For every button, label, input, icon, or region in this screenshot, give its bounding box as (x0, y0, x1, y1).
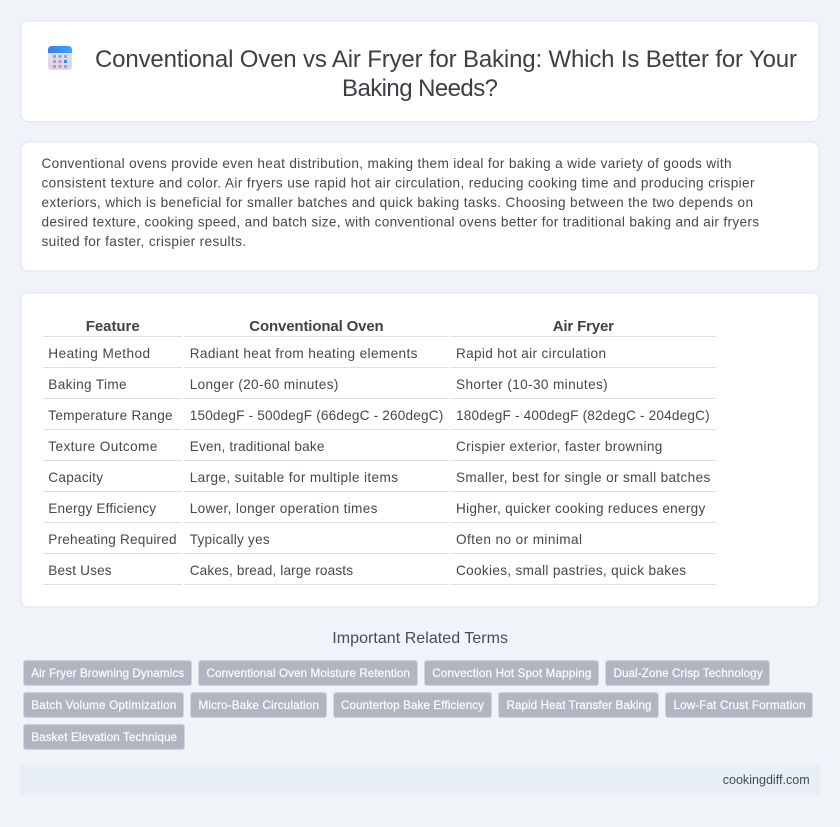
row: capacity: Smaller, best for single or small batches (456, 470, 711, 485)
row: energy efficiency (43, 501, 716, 523)
row: temperature range: Temperature Range (48, 408, 173, 423)
row: best uses: Cakes, bread, large roasts (190, 563, 353, 578)
tag (190, 692, 326, 718)
tag (24, 724, 184, 750)
icon: calendar (48, 46, 72, 70)
table header: Feature (86, 318, 140, 335)
row: energy efficiency: Energy Efficiency (48, 501, 156, 516)
tag: Micro-Bake Circulation (198, 699, 319, 712)
row: texture outcome: Texture Outcome (48, 439, 157, 454)
footer bar (20, 764, 820, 796)
row: texture outcome: Crispier exterior, faster browning (456, 439, 662, 454)
row: capacity: Capacity (48, 470, 103, 485)
title text: Baking Needs? (342, 75, 498, 102)
heading: important related terms: Important Related Terms (332, 630, 508, 647)
row: baking time: Longer (20-60 minutes) (190, 377, 338, 392)
row: heating method: Rapid hot air circulation (456, 346, 606, 361)
row: capacity: Large, suitable for multiple items (190, 470, 398, 485)
row: best uses: Best Uses (48, 563, 112, 578)
tag list (24, 660, 812, 750)
table header: Air Fryer (553, 318, 614, 335)
tag: Basket Elevation Technique (31, 731, 177, 744)
tag: Conventional Oven Moisture Retention (206, 667, 410, 680)
row: energy efficiency: Lower, longer operation times (190, 501, 378, 516)
title text: Conventional Oven vs Air Fryer for Baking: Which Is Better for Your (95, 46, 797, 73)
row: heating method: Heating Method (48, 346, 150, 361)
row: temperature range (43, 408, 716, 430)
tag: Countertop Bake Efficiency (341, 699, 484, 712)
row: best uses: Cookies, small pastries, quick bakes (456, 563, 686, 578)
panel: title (21, 21, 819, 122)
tag: Air Fryer Browning Dynamics (31, 667, 184, 680)
summary paragraph: consistent texture and color. Air fryers use rapid hot air circulation, reducing cooking time and producing crispier (42, 176, 755, 190)
tag: Low-Fat Crust Formation (674, 699, 806, 712)
tag: Convection Hot Spot Mapping (432, 667, 591, 680)
tag (198, 660, 418, 686)
row: texture outcome (43, 439, 716, 461)
summary paragraph: Conventional ovens provide even heat distribution, making them ideal for baking a wide variety of goods with (42, 156, 732, 171)
tag: Rapid Heat Transfer Baking (506, 699, 652, 712)
tag (24, 660, 192, 686)
row: preheating required (43, 532, 716, 554)
title text (95, 46, 797, 102)
summary paragraph (42, 156, 759, 249)
row: heating method: Radiant heat from heating elements (190, 346, 418, 361)
tag (666, 692, 812, 718)
tag (424, 660, 598, 686)
row: baking time (43, 377, 716, 399)
table header (43, 318, 716, 337)
panel: summary (21, 142, 819, 271)
row: temperature range: 180degF - 400degF (82degC - 204degC) (456, 408, 710, 423)
summary paragraph: desired texture, cooking speed, and batch size, with conventional ovens better for traditional baking and air fryers (42, 214, 759, 230)
row: temperature range: 150degF - 500degF (66degC - 260degC) (190, 408, 443, 423)
tag: Dual-Zone Crisp Technology (614, 667, 763, 680)
row: baking time: Shorter (10-30 minutes) (456, 377, 608, 392)
row: heating method (43, 346, 716, 368)
tag (498, 692, 658, 718)
tag (24, 692, 184, 718)
row: capacity (43, 470, 716, 492)
summary paragraph: suited for faster, crispier results. (42, 234, 246, 249)
tag: Batch Volume Optimization (31, 699, 176, 712)
tag (334, 692, 492, 718)
table header: Conventional Oven (249, 318, 384, 335)
tag (606, 660, 770, 686)
row: texture outcome: Even, traditional bake (190, 439, 324, 454)
row: preheating required: Preheating Required (48, 532, 177, 547)
panel: comparison table (21, 293, 819, 607)
row: preheating required: Often no or minimal (456, 532, 582, 547)
row: best uses (43, 563, 716, 585)
row: baking time: Baking Time (48, 377, 127, 392)
row: energy efficiency: Higher, quicker cooking reduces energy (456, 501, 706, 516)
footer source: cookingdiff.com (723, 773, 810, 787)
summary paragraph: exteriors, which is beneficial for smaller batches and quick baking tasks. Choosing between the two depends on (42, 195, 753, 210)
row: preheating required: Typically yes (190, 532, 270, 547)
